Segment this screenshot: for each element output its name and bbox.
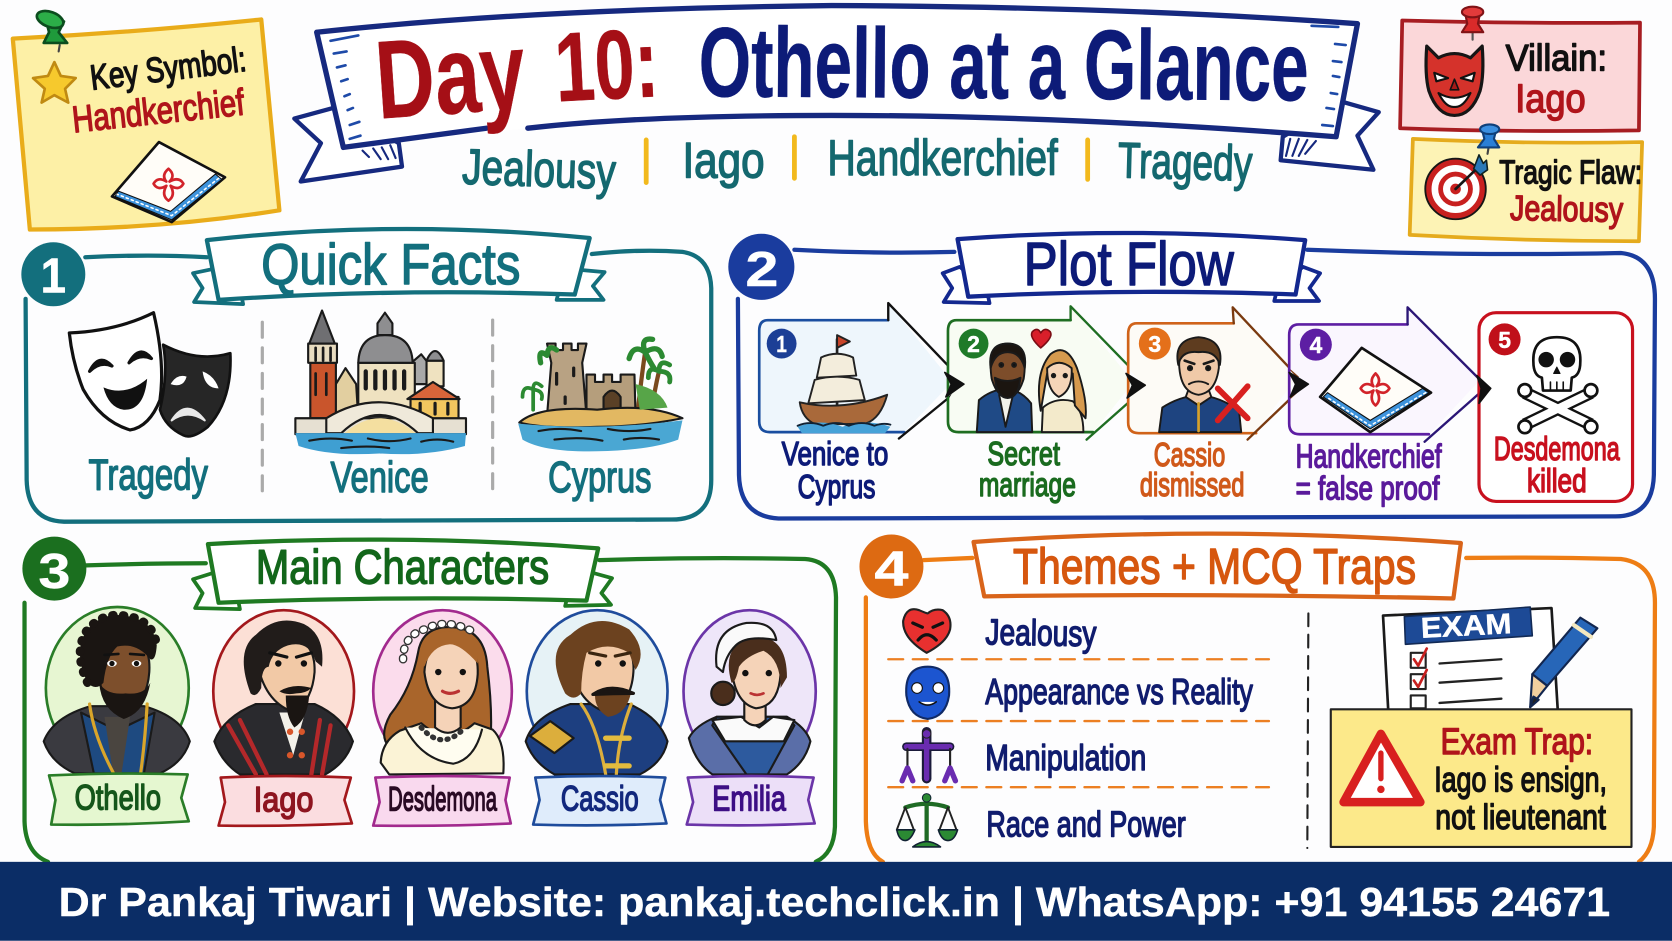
icon: green pin [35, 8, 67, 51]
panel outline [25, 558, 836, 862]
step 3 label: dismissed [1140, 467, 1244, 504]
label: Venice: Venice [331, 453, 429, 502]
panel 2: plot flow [728, 230, 1655, 518]
vertical dashed divider [1307, 613, 1308, 848]
keyword Handkerchief: Handkerchief [827, 130, 1058, 186]
icon: blue pin [1478, 124, 1499, 154]
theme: Jealousy: Jealousy [985, 611, 1097, 654]
text: Key Symbol: Key Symbol: [88, 40, 248, 98]
title: 10: 10: [552, 7, 661, 123]
title: Othello at a Glance: Othello at a Glance [698, 7, 1309, 122]
icon: skull and crossbones [1518, 337, 1597, 433]
label: Othello [49, 774, 189, 825]
note paper [13, 19, 279, 230]
number badge 3 [22, 537, 86, 601]
step 3: cassio dismissed [1128, 307, 1298, 440]
icon: puppet cross [902, 730, 955, 781]
theme: Manipulation: Manipulation [985, 737, 1146, 778]
icon: venice [295, 311, 466, 454]
icon: couple [977, 344, 1086, 432]
icon: pencil [1530, 618, 1597, 707]
icon: red pin [1462, 7, 1483, 40]
footer contact bar: Dr Pankaj Tiwari | Website: pankaj.techclick.in | WhatsApp: +91 94155 24671 [59, 879, 1610, 925]
label: Iago: Iago [254, 781, 314, 820]
step 2 label [979, 436, 1076, 504]
step 3 label: Cassio [1154, 437, 1225, 474]
icon: ship [798, 335, 890, 433]
number badge 2: 2 [745, 243, 778, 297]
number badge 4: 4 [874, 543, 909, 597]
banner outline [317, 6, 1357, 147]
panel outline [866, 558, 1655, 862]
step 2 label: marriage [979, 467, 1076, 504]
label: Emilia [687, 776, 815, 825]
icon: heart [1032, 329, 1051, 348]
step 2: secret marriage: 2 [967, 331, 980, 357]
icon: devil mask [1426, 46, 1483, 115]
section banner: Quick Facts [261, 233, 520, 297]
text: Iago: Iago [1515, 77, 1586, 121]
number badge 4 [859, 534, 923, 598]
icon: handkerchief [112, 142, 225, 222]
subtitle keywords [461, 130, 1253, 200]
icon: handkerchief [1320, 348, 1431, 432]
icon: warning triangle [1344, 734, 1420, 802]
label: Desdemona [373, 776, 511, 826]
theme: Appearance vs Reality: Appearance vs Reality [985, 671, 1254, 712]
step 4: handkerchief false proof: 4 [1309, 332, 1322, 358]
step 4 label [1296, 438, 1442, 507]
label: Othello: Othello [75, 779, 161, 818]
keyword Iago: Iago [682, 132, 765, 188]
label: Cassio: Cassio [561, 780, 639, 819]
portrait: Othello [44, 607, 190, 773]
label: Emilia: Emilia [712, 780, 786, 819]
banner stitching [331, 26, 1346, 139]
step 4 label: = false proof [1296, 470, 1440, 507]
icon: star [33, 62, 76, 103]
step 2 label: Secret [987, 436, 1060, 473]
icon: cyprus castle [518, 339, 682, 451]
label: Cassio [533, 776, 666, 825]
number badge 2 [728, 234, 794, 300]
theme: Race and Power: Race and Power [986, 803, 1186, 844]
number badge 1 [21, 242, 85, 306]
step 5: desdemona killed: 5 [1498, 327, 1511, 353]
title banner [294, 6, 1379, 182]
portrait: Iago [213, 610, 354, 774]
icon: exam sheet [1383, 607, 1558, 713]
step 2: secret marriage [948, 306, 1142, 440]
step 1 label: Venice to [782, 436, 888, 473]
icon: red cross [1218, 386, 1248, 420]
title: Day: Day [372, 9, 529, 143]
flow arrowheads [945, 372, 1491, 403]
callout: exam trap: not lieutenant [1435, 798, 1606, 837]
step 5: desdemona killed: killed [1527, 463, 1587, 500]
step 3: cassio dismissed: 3 [1148, 331, 1161, 357]
text: Villain: Villain: [1506, 37, 1607, 79]
section banner: Plot Flow [1024, 230, 1235, 298]
label: Iago [219, 776, 352, 826]
icon: jealous heart [903, 609, 950, 653]
label: Desdemona: Desdemona [388, 781, 497, 819]
panel outline [26, 251, 711, 522]
section banner [943, 230, 1320, 303]
keyword Tragedy: Tragedy [1117, 132, 1253, 192]
icon: cassio [1159, 337, 1241, 432]
step 1: venice to cyprus [759, 303, 958, 439]
section banner [193, 540, 612, 609]
panel outline [738, 250, 1655, 518]
note: key symbol [13, 8, 279, 230]
panel 4: themes and mcq traps [859, 534, 1655, 862]
step 1 label: Cyprus [798, 469, 875, 506]
callout: exam trap: Iago is ensign, [1434, 760, 1607, 799]
section banner: Themes + MCQ Traps [1013, 539, 1416, 595]
banner body [317, 6, 1357, 147]
banner left tail [294, 107, 402, 182]
dashed separators [888, 659, 1269, 787]
panel 1: quick facts [21, 229, 711, 522]
panel 3: main characters [22, 537, 836, 862]
footer contact bar [0, 862, 1672, 941]
step 1 label [782, 436, 888, 506]
banner right tail [1281, 102, 1379, 170]
icon: exam sheet: EXAM [1420, 608, 1512, 645]
icon: theatre masks [69, 313, 230, 436]
step 4 label: Handkerchief [1296, 438, 1442, 475]
portrait: Cassio [526, 610, 668, 774]
banner fold hatching [363, 139, 1316, 159]
section banner [193, 229, 605, 304]
step 4: handkerchief false proof [1289, 307, 1480, 442]
keyword Jealousy: Jealousy [461, 139, 617, 200]
portrait: Desdemona [373, 610, 512, 774]
step 5: desdemona killed [1479, 313, 1633, 501]
section banner: Main Characters [256, 542, 549, 595]
icon: target [1426, 155, 1488, 219]
note: villain [1400, 7, 1640, 131]
note paper [1410, 139, 1642, 241]
text: Handkerchief: Handkerchief [70, 81, 247, 140]
note paper [1400, 21, 1640, 131]
step 5: desdemona killed: Desdemona [1494, 431, 1620, 468]
number badge 3: 3 [38, 545, 70, 599]
note: tragic flaw [1410, 124, 1642, 241]
icon: scales [897, 794, 958, 847]
portrait: Emilia [684, 610, 816, 774]
text: Jealousy: Jealousy [1510, 189, 1624, 230]
callout: exam trap: Exam Trap: [1441, 720, 1593, 762]
separator [646, 137, 1088, 183]
callout: exam trap [1331, 709, 1631, 847]
dashed dividers [262, 320, 493, 493]
icon: blue mask [906, 667, 949, 719]
label: Cyprus: Cyprus [548, 453, 652, 502]
step 1: venice to cyprus: 1 [776, 331, 787, 357]
step 3 label [1140, 437, 1244, 504]
label: Tragedy: Tragedy [89, 451, 208, 500]
number badge 1: 1 [41, 249, 66, 303]
